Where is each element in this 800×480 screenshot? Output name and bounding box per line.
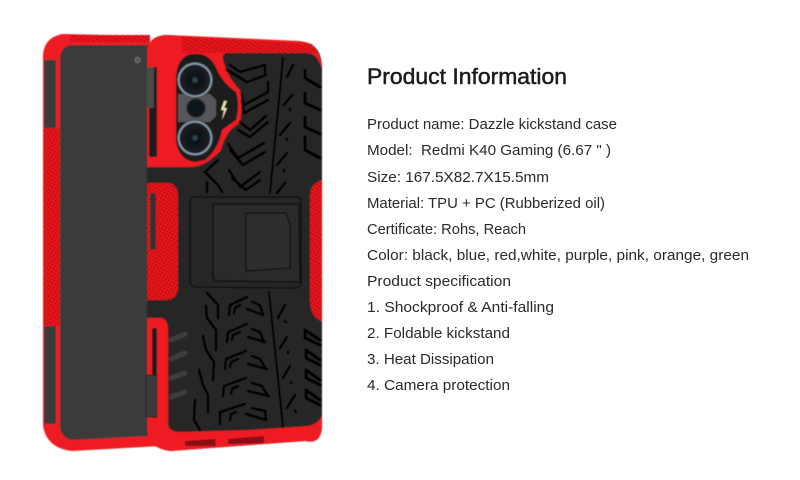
module metal plate	[178, 94, 216, 122]
right textured grip	[310, 180, 322, 322]
lower chevrons	[229, 297, 263, 315]
front textured side grip	[44, 128, 60, 326]
stand outer plate	[190, 197, 301, 288]
slash marks	[277, 65, 295, 408]
lower side button	[146, 375, 157, 417]
screen	[60, 45, 150, 440]
size: Size: 167.5X82.7X15.5mm	[367, 169, 549, 186]
kickstand	[190, 197, 301, 288]
lightning logo	[221, 101, 227, 120]
lower left wavy groove	[194, 293, 218, 430]
upper textured grip left	[147, 183, 178, 300]
red camera head and top band	[147, 35, 322, 167]
product name: Product name: Dazzle kickstand case	[367, 116, 617, 133]
upper black side strip	[44, 60, 56, 128]
black band upper	[147, 167, 171, 183]
phone case back view	[146, 35, 322, 451]
tire tread pattern	[171, 58, 320, 430]
stand hinge window	[246, 213, 290, 271]
top lens	[177, 62, 213, 98]
feature 2: 2. Foldable kickstand	[367, 325, 510, 342]
middle lens	[187, 99, 205, 117]
lower black side strip	[44, 326, 56, 424]
textured top band	[182, 37, 316, 53]
certificate: Certificate: Rohs, Reach	[367, 221, 526, 238]
upper left curve	[205, 160, 222, 192]
right ribs lower	[305, 330, 320, 405]
upper side slot	[149, 67, 157, 157]
camera module	[176, 54, 238, 162]
module base	[176, 54, 238, 162]
bottom lens	[177, 120, 213, 156]
bottom ports	[185, 436, 264, 446]
upper chevrons	[227, 65, 268, 190]
front textured top edge	[70, 35, 150, 42]
phone case front view	[43, 34, 160, 451]
material: Material: TPU + PC (Rubberized oil)	[367, 195, 605, 212]
specification heading: Product specification	[367, 273, 511, 290]
front red bumper	[43, 34, 160, 451]
feature 4: 4. Camera protection	[367, 377, 510, 394]
lower red frame	[147, 318, 322, 451]
title: Product Information	[367, 64, 567, 89]
feature 3: 3. Heat Dissipation	[367, 351, 494, 368]
front camera hole	[135, 58, 140, 62]
tread dots	[284, 109, 296, 412]
right ribs upper	[305, 70, 320, 158]
middle side slot	[150, 193, 156, 250]
stand inner plate	[213, 204, 300, 282]
upper side button	[147, 67, 154, 108]
left ribs lower	[171, 334, 185, 397]
long grooves	[269, 58, 283, 427]
model: Model: Redmi K40 Gaming (6.67 " )	[367, 142, 611, 159]
color: Color: black, blue, red,white, purple, pink, orange, green	[367, 247, 749, 264]
back body	[147, 35, 322, 451]
product information text block	[367, 64, 749, 394]
lower side slot	[152, 328, 157, 418]
black band lower	[147, 300, 171, 318]
feature 1: 1. Shockproof & Anti-falling	[367, 299, 554, 316]
